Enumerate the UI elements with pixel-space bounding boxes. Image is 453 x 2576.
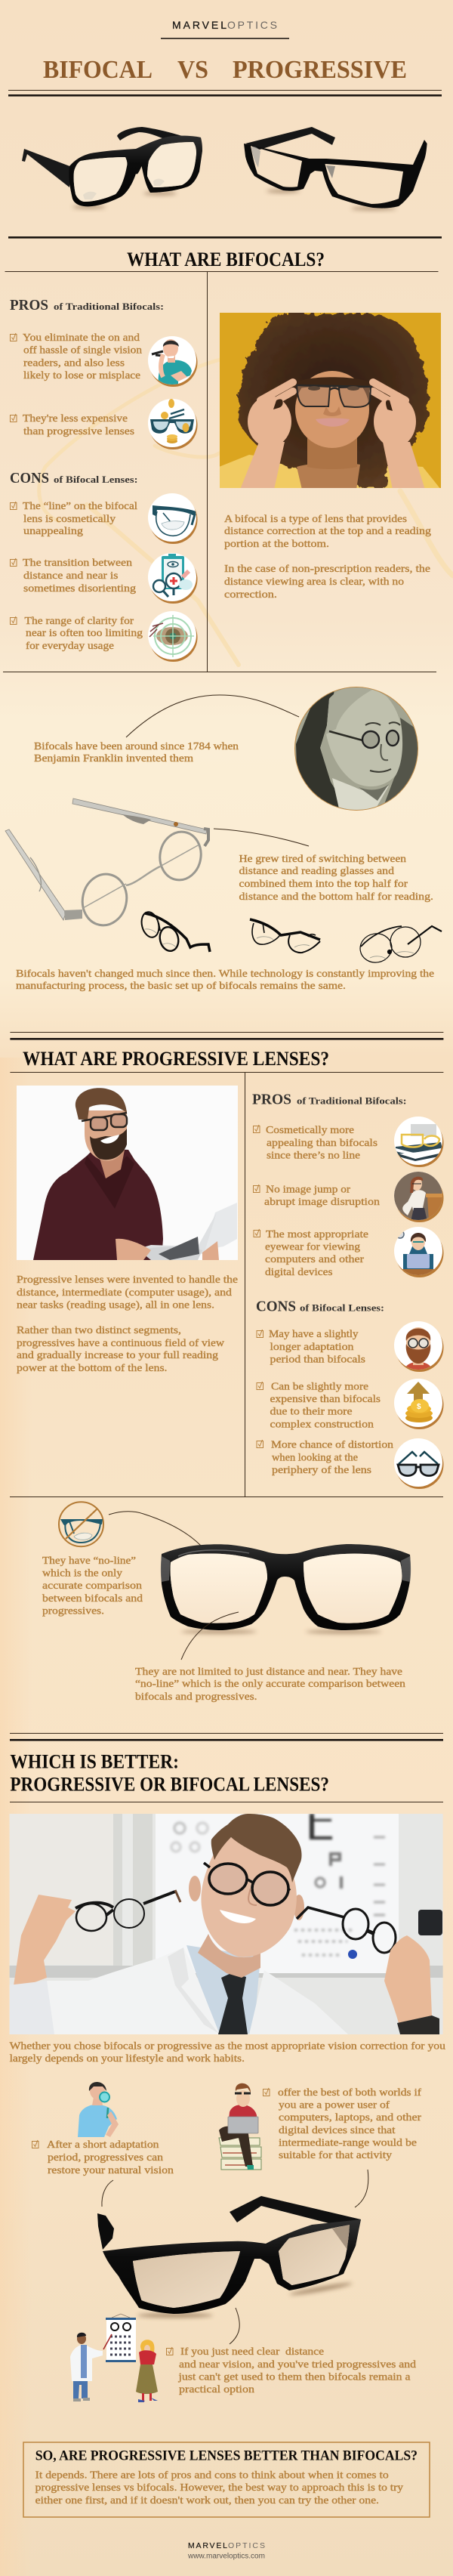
main title: VS [177, 56, 208, 84]
text block: what is a bifocal: distance viewing area is clear, with no [224, 576, 404, 588]
text block: what progressive lenses are: power at the bottom of the lens. [17, 1363, 168, 1374]
con item: more expensive [257, 1381, 381, 1431]
callout: so, are progressive lenses better: It depends. There are lots of pros and cons to think about when it comes to [35, 2470, 389, 2482]
check item: best of both worlds: intermediate-range would be [279, 2138, 417, 2149]
callout: so, are progressive lenses better: either one first, and if it doesn't work out, then you can try the other one. [35, 2495, 379, 2507]
cons heading [10, 470, 137, 486]
arrow: arc to Franklin [126, 695, 299, 737]
icon: man with glasses [148, 336, 198, 387]
panel: progressive pros and cons [252, 1092, 444, 1489]
photo: Franklin's silver spectacles [5, 798, 208, 929]
illustration: man on books with laptop [219, 2083, 261, 2170]
logo underline [161, 38, 289, 39]
logo: footer with website: MARVEL [188, 2541, 227, 2550]
con item: transition [11, 558, 136, 595]
pro item: appropriate for computers: eyewear for viewing [265, 1242, 360, 1252]
illustration: bifocal glasses 3/4 view [22, 127, 202, 208]
callout: so, are progressive lenses better [23, 2442, 430, 2517]
cons heading [256, 1298, 384, 1314]
text: he grew tired: combined them into the top half for [239, 879, 408, 890]
illustration: large black glasses [97, 2196, 361, 2318]
con item: adaptation period: period than bifocals [270, 1354, 365, 1366]
heading: what are progressive lenses: WHAT ARE PROGRESSIVE LENSES? [23, 1048, 329, 1070]
pro item: no image jump: abrupt image disruption [264, 1197, 380, 1208]
con item: adaptation period: May have a slightly [269, 1329, 358, 1340]
icon: bearded man [394, 1321, 444, 1372]
pro item: no on and off hassle: You eliminate the on and [23, 332, 140, 344]
con item: range of clarity: The range of clarity for [24, 616, 134, 627]
pro item: no on and off hassle [11, 332, 142, 381]
text: Franklin invented bifocals: Benjamin Franklin invented them [34, 753, 193, 764]
con item: transition: The transition between [23, 558, 132, 569]
photo: woman with curly hair adjusting glasses [219, 313, 441, 490]
main title: PROGRESSIVE [233, 56, 407, 84]
text: no-line comparison [42, 1555, 143, 1617]
text: no-line comparison: accurate comparison [42, 1580, 142, 1592]
cons heading: of Bifocal Lenses: [54, 474, 137, 485]
text: Franklin invented bifocals [34, 741, 239, 764]
text: not limited to distance and near: bifocals and progressives. [135, 1691, 257, 1703]
icon: small bifocal glasses 2 [250, 919, 320, 953]
photo: optician holding two pairs of glasses [8, 1814, 443, 2034]
text: not limited to distance and near: “no-line” which is the only accurate comparison between [135, 1679, 405, 1690]
pro item: cosmetically appealing [254, 1125, 378, 1162]
icon: glasses and coins [148, 399, 198, 449]
arrow: arc to front glasses [109, 1512, 201, 1546]
illustration: progressive glasses front view [161, 1544, 411, 1634]
cons heading: of Bifocal Lenses: [300, 1302, 384, 1313]
text block: what is a bifocal: distance correction at the top and a reading [224, 526, 431, 537]
text: bifocals have not changed: manufacturing process, the basic set up of bifocals remains the same. [16, 981, 346, 992]
text block: what is a bifocal: In the case of non-prescription readers, the [224, 564, 430, 575]
con item: distortion: periphery of the lens [272, 1465, 371, 1476]
logo: top [172, 19, 277, 31]
heading: which is better [10, 1751, 329, 1796]
arrow: arc from adaptation text [102, 2180, 113, 2207]
logo: footer with website: www.marveloptics.com [187, 2553, 265, 2561]
text block: what is a bifocal: A bifocal is a type of lens that provides [224, 514, 407, 525]
arrow: arc to spectacles text [214, 829, 309, 846]
heading: which is better: WHICH IS BETTER: [10, 1751, 179, 1773]
con item: distortion: More chance of distortion [271, 1440, 393, 1450]
main title [43, 56, 407, 84]
background watermark glasses [39, 360, 453, 665]
text block: what progressive lenses are: and gradually increase to your full reading [17, 1350, 218, 1361]
text: he grew tired: distance and reading glasses and [239, 866, 394, 877]
text: bifocals have not changed [16, 968, 434, 992]
con item: distortion [257, 1440, 393, 1476]
heading: which is better: PROGRESSIVE OR BIFOCAL LENSES? [10, 1774, 329, 1796]
con item: range of clarity: for everyday usage [26, 641, 114, 652]
pro item: appropriate for computers: The most appropriate [266, 1229, 368, 1240]
icon: coins and rising arrow [394, 1379, 444, 1429]
check item: clear distance and near: If you just need clear distance [180, 2346, 324, 2358]
con item: range of clarity: near is often too limiting [26, 628, 143, 639]
check item: clear distance and near [166, 2346, 416, 2395]
check item: best of both worlds: suitable for that activity [279, 2150, 392, 2161]
check item: best of both worlds: you are a power user of [279, 2100, 390, 2111]
illustration: progressive glasses 3/4 view [244, 127, 427, 210]
con item: distortion: when looking at the [272, 1452, 358, 1464]
con item: the line [11, 501, 137, 537]
text block: what is a bifocal [224, 514, 431, 601]
icon: no-line crossed bifocal [59, 1502, 103, 1546]
arrow: arc from glasses to text [181, 1612, 239, 1660]
check item: best of both worlds: computers, laptops, and other [279, 2112, 421, 2124]
heading: what are bifocals: WHAT ARE BIFOCALS? [127, 249, 325, 270]
text: not limited to distance and near [135, 1666, 405, 1703]
photo: bearded man with laptop [17, 1086, 238, 1260]
pro item: cosmetically appealing: appealing than bifocals [267, 1138, 378, 1149]
icon: clipboard and magnifiers [148, 553, 198, 604]
text: not limited to distance and near: They are not limited to just distance and near. They have [135, 1666, 402, 1678]
pro item: no on and off hassle: off hassle of single vision [23, 345, 142, 357]
illustration: optician and patient with eye chart [70, 2314, 158, 2402]
pros heading: PROS [252, 1092, 291, 1108]
check item: short adaptation period: After a short adaptation [47, 2139, 159, 2151]
logo: footer with website [187, 2541, 265, 2561]
text: no-line comparison: between bifocals and [42, 1593, 143, 1605]
text: no-line comparison: progressives. [42, 1606, 104, 1617]
text block: what progressive lenses are: Progressive lenses were invented to handle the [17, 1274, 238, 1286]
pro item: cosmetically appealing: Cosmetically more [266, 1125, 354, 1136]
icon: small bifocal glasses 3 [358, 926, 442, 965]
text: depends on lifestyle: largely depends on your lifestyle and work habits. [10, 2053, 245, 2065]
text block: what is a bifocal: portion at the bottom. [224, 539, 329, 550]
icon: glasses [394, 1438, 444, 1489]
arrow: arc to practical option text [230, 2308, 239, 2344]
text: no-line comparison: which is the only [42, 1568, 122, 1580]
con item: transition: distance and near is [23, 570, 118, 582]
text block: what progressive lenses are: distance, intermediate (computer usage), and [17, 1287, 232, 1299]
callout: so, are progressive lenses better: SO, ARE PROGRESSIVE LENSES BETTER THAN BIFOCALS? [35, 2448, 418, 2464]
icon: books with yellow glasses [394, 1117, 444, 1167]
check item: best of both worlds: digital devices since that [279, 2125, 396, 2136]
main title: BIFOCAL [43, 56, 153, 84]
pros heading: of Traditional Bifocals: [54, 301, 164, 312]
text: depends on lifestyle: Whether you chose bifocals or progressive as the most appropriate vision correction for you [10, 2041, 445, 2052]
pro item: no on and off hassle: readers, and also less [23, 357, 125, 369]
pros heading: of Traditional Bifocals: [297, 1095, 406, 1107]
con item: the line: The “line” on the bifocal [23, 501, 137, 512]
check item: best of both worlds [263, 2087, 421, 2161]
pro item: appropriate for computers: digital devices [265, 1267, 332, 1278]
logo: footer with website: OPTICS [228, 2541, 265, 2550]
icon: eye target [148, 611, 198, 662]
pro item: less expensive: than progressive lenses [23, 426, 134, 437]
panel: bifocal pros and cons [10, 297, 198, 662]
pro item: less expensive: They're less expensive [23, 413, 128, 425]
icon: woman at laptop [394, 1227, 444, 1277]
pros heading: PROS [10, 297, 48, 314]
text: he grew tired: distance and the bottom half for reading. [239, 891, 433, 903]
con item: the line: unappealing [23, 526, 83, 537]
cons heading: CONS [10, 470, 49, 486]
logo: top: OPTICS [227, 19, 277, 31]
pro item: no on and off hassle: likely to lose or misplace [23, 370, 140, 381]
portrait: Benjamin Franklin [293, 686, 421, 812]
con item: more expensive: complex construction [270, 1419, 374, 1431]
callout: so, are progressive lenses better: progressive lenses vs bifocals. However, the best way to approach this is to try [35, 2482, 403, 2494]
con item: more expensive: expensive than bifocals [270, 1394, 381, 1405]
text: bifocals have not changed: Bifocals haven't changed much since then. While technology is constantly improving the [16, 968, 434, 980]
check item: clear distance and near: just can't get used to them then bifocals remain a [177, 2372, 411, 2383]
check item: short adaptation period: restore your natural vision [48, 2165, 174, 2176]
pro item: appropriate for computers: computers and other [265, 1254, 364, 1265]
check item: short adaptation period [32, 2139, 174, 2176]
icon: woman at lectern [394, 1172, 444, 1222]
arrow: arc from power user text [355, 2170, 368, 2207]
con item: range of clarity [11, 616, 143, 652]
pro item: appropriate for computers [254, 1229, 368, 1278]
con item: adaptation period [257, 1329, 365, 1366]
check item: clear distance and near: practical option [179, 2384, 254, 2395]
text: Franklin invented bifocals: Bifocals have been around since 1784 when [34, 741, 239, 752]
text block: what progressive lenses are: near tasks (reading usage), all in one lens. [17, 1299, 214, 1311]
icon: bifocal lens line [148, 493, 198, 544]
icon: coins and rising arrow: $ [417, 1403, 421, 1411]
con item: transition: sometimes disorienting [23, 583, 136, 595]
check item: short adaptation period: period, progressives can [48, 2152, 163, 2164]
pro item: no image jump: No image jump or [266, 1185, 350, 1196]
con item: adaptation period: longer adaptation [270, 1342, 353, 1353]
text block: what progressive lenses are: Rather than two distinct segments, [17, 1325, 181, 1336]
con item: more expensive: due to their more [270, 1407, 352, 1418]
text: no-line comparison: They have “no-line” [42, 1555, 136, 1567]
text: he grew tired [239, 854, 433, 903]
text: depends on lifestyle [10, 2041, 445, 2065]
illustration: man with magnifier [78, 2082, 119, 2137]
text block: what is a bifocal: correction. [224, 589, 277, 601]
check item: clear distance and near: and near vision, and you've tried progressives and [179, 2359, 416, 2371]
cons heading: CONS [256, 1298, 296, 1314]
con item: more expensive: Can be slightly more [271, 1381, 368, 1393]
logo: top: MARVEL [172, 19, 226, 31]
icon: small bifocal glasses 1 [139, 910, 210, 953]
pros heading [252, 1092, 406, 1108]
pro item: less expensive [11, 413, 134, 437]
check item: best of both worlds: offer the best of both worlds if [278, 2087, 421, 2099]
text block: what progressive lenses are: progressives have a continuous field of view [17, 1338, 225, 1349]
con item: the line: lens is cosmetically [23, 514, 116, 525]
pro item: no image jump [254, 1185, 380, 1208]
text block: what progressive lenses are [17, 1274, 238, 1374]
pro item: cosmetically appealing: since there’s no line [267, 1150, 360, 1162]
text: he grew tired: He grew tired of switching between [239, 854, 406, 865]
pros heading [10, 297, 164, 314]
